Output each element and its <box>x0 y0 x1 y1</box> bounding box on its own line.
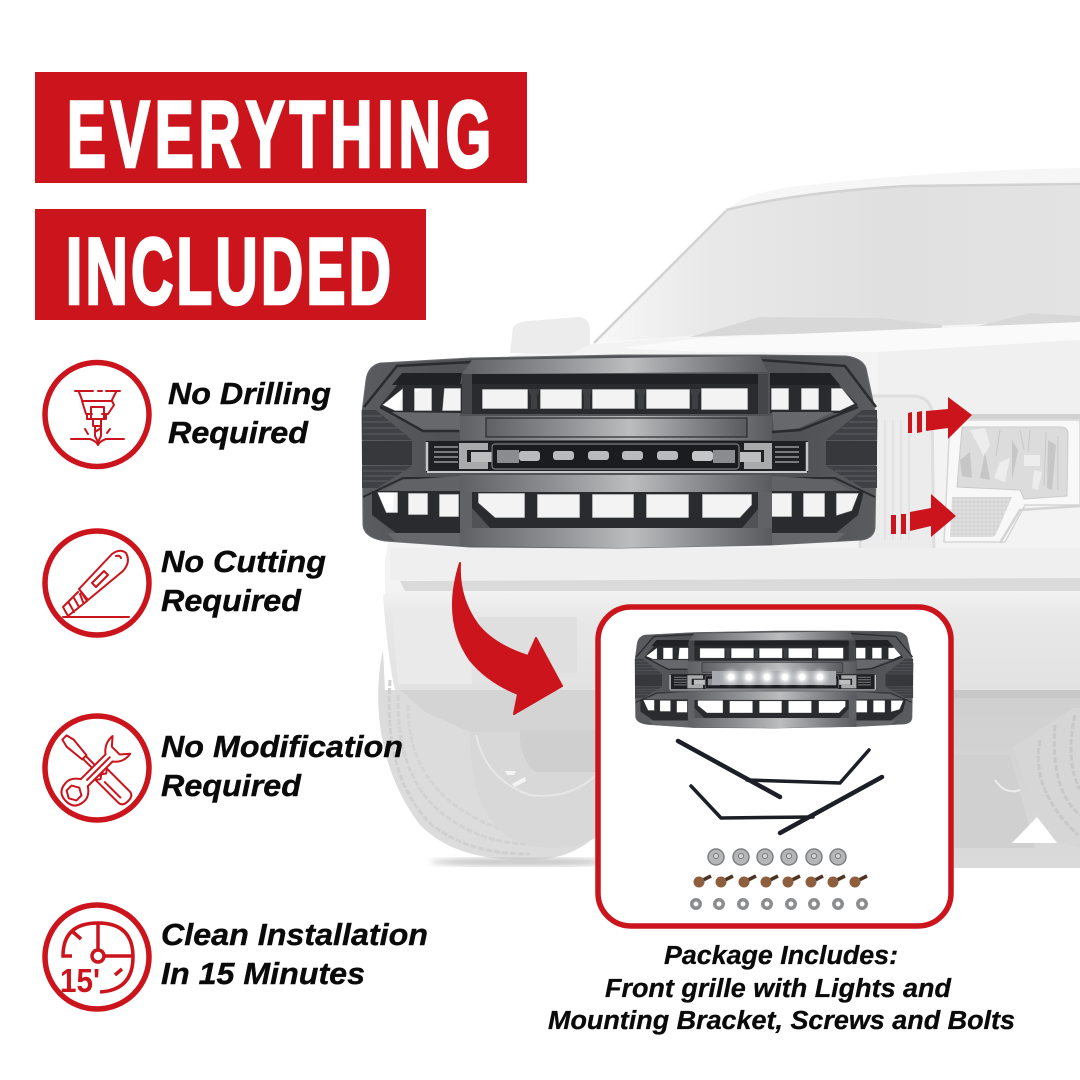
under-bumper <box>398 688 600 732</box>
truck: fog lamp lens <box>950 497 1012 537</box>
label: no cutting required: Required <box>161 583 302 618</box>
truck: grille surround <box>860 396 934 555</box>
mounting brackets <box>678 741 882 833</box>
panel: package contents <box>598 607 951 926</box>
label: no modification required: No Modification <box>161 729 403 764</box>
small grille with lights on <box>635 631 913 728</box>
label: clean installation in 15 minutes: In 15 Minutes <box>161 956 365 991</box>
lower valance <box>520 730 600 772</box>
bumper corner insert <box>392 610 472 684</box>
package includes caption: Package Includes: <box>664 942 898 970</box>
arrow: upper right <box>908 397 972 439</box>
arrow: lower right <box>891 494 956 537</box>
truck: side mirror <box>510 317 590 354</box>
truck: wipers <box>690 313 1080 337</box>
truck: cab roof <box>726 168 1080 212</box>
title line: EVERYTHING: EVERYTHING <box>67 81 491 187</box>
icon: drill <box>45 362 149 466</box>
white gap under truck <box>1012 817 1057 843</box>
label: no modification required: Required <box>161 768 302 803</box>
right wheel area <box>600 690 1080 868</box>
icon: utility knife <box>45 531 149 635</box>
label: no drilling required: No Drilling <box>168 376 331 411</box>
faded truck background <box>378 168 1080 868</box>
bumper <box>383 591 1080 690</box>
icon: 15 minute clock <box>45 905 149 1009</box>
label: no cutting required: No Cutting <box>161 544 326 579</box>
truck: windshield seams <box>594 184 1080 343</box>
curved arrow to package <box>453 563 562 714</box>
title line: INCLUDED: INCLUDED <box>66 218 391 324</box>
feature: clean installation <box>45 905 428 1009</box>
icon: wrench and screwdriver <box>45 716 149 820</box>
nuts <box>708 849 846 865</box>
package includes caption: Front grille with Lights and <box>605 975 952 1003</box>
feature: no modification <box>45 716 403 820</box>
right tire and wheel <box>954 708 1080 848</box>
screws <box>694 876 867 888</box>
truck: trim below headlight <box>1000 506 1080 543</box>
label: clean installation in 15 minutes: Clean Installation <box>161 917 428 952</box>
truck: grille surround slats <box>885 420 909 540</box>
truck: hood and body <box>385 318 1080 600</box>
truck: hood shadow stripe <box>400 578 1080 591</box>
truck: hood crease highlights <box>620 322 1080 352</box>
washers <box>692 900 866 908</box>
bumper lower band <box>940 690 1080 698</box>
feature: no drilling <box>45 362 331 466</box>
ground shadow <box>430 858 610 866</box>
truck: hood right side <box>878 340 1080 416</box>
label: no drilling required: Required <box>168 415 309 450</box>
package includes caption: Mounting Bracket, Screws and Bolts <box>548 1007 1015 1035</box>
main grille product image <box>362 355 877 548</box>
truck: windshield <box>596 185 1080 343</box>
left tire <box>378 650 600 860</box>
bumper recess <box>477 617 577 673</box>
feature: no cutting <box>45 531 326 635</box>
truck: lower grille bar <box>390 548 1080 580</box>
truck: fender crease <box>945 414 1080 419</box>
icon: 15 minute clock: 15' <box>60 962 100 999</box>
truck: headlight surround <box>944 420 1080 542</box>
truck: headlight lens <box>957 427 1068 499</box>
